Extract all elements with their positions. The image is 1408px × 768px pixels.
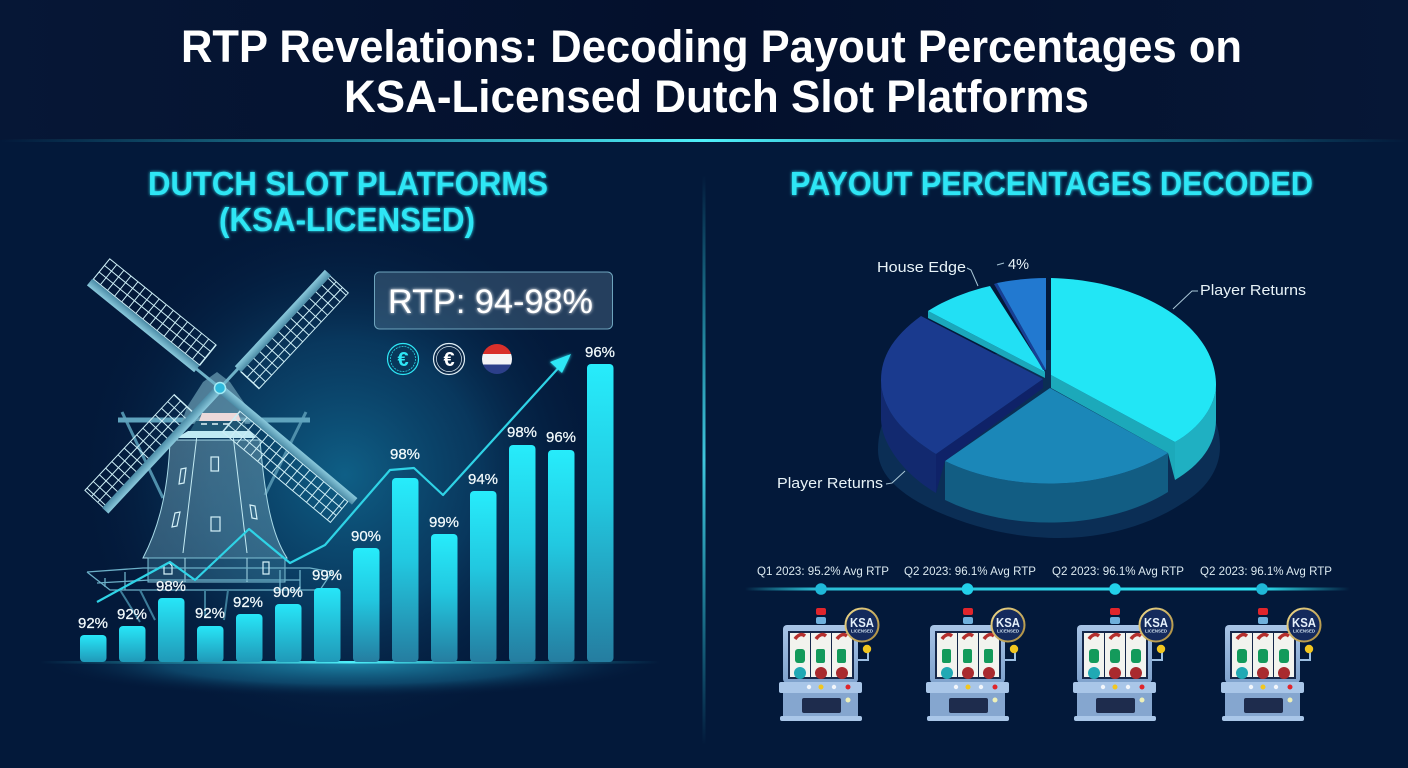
- slice: house edge: [928, 286, 1045, 378]
- KSA badge: [1288, 608, 1320, 642]
- timeline labels: Q2 2023: 96.1% Avg RTP: [1052, 566, 1184, 578]
- heading: Dutch slot platforms: [148, 165, 548, 238]
- header banner: [0, 0, 1408, 140]
- heading: Dutch slot platforms: DUTCH SLOT PLATFORMS: [148, 165, 548, 202]
- timeline labels: Q2 2023: 96.1% Avg RTP: [1200, 566, 1332, 578]
- title: KSA-Licensed Dutch Slot Platforms: [344, 71, 1089, 122]
- bar value labels: 99%: [312, 567, 342, 584]
- KSA badge: KSA: [1144, 616, 1168, 630]
- timeline labels: [757, 566, 1332, 578]
- bar value labels: 96%: [546, 429, 576, 446]
- windmill tower: [87, 435, 332, 622]
- bar value labels: 96%: [585, 344, 615, 361]
- pie label: 4 percent: 4%: [1008, 257, 1029, 273]
- windmill sail: north-west: [87, 258, 240, 391]
- timeline labels: Q2 2023: 96.1% Avg RTP: [904, 566, 1036, 578]
- bar value labels: [78, 344, 615, 632]
- pie label: player returns left: [777, 471, 905, 492]
- windmill cap: [176, 372, 256, 438]
- bar value labels: 92%: [195, 605, 225, 622]
- title: RTP Revelations: Decoding Payout Percentages on: [181, 21, 1242, 72]
- KSA badge: [1140, 608, 1172, 642]
- slice: mid blue: [945, 388, 1168, 523]
- KSA badge: LICENSED: [1293, 628, 1316, 634]
- KSA badge: LICENSED: [997, 628, 1020, 634]
- icon: white euro coin: €: [443, 349, 455, 371]
- bars: [80, 364, 614, 662]
- bar value labels: 98%: [507, 424, 537, 441]
- icon: white euro coin: [434, 344, 464, 374]
- KSA badge: KSA: [996, 616, 1020, 630]
- pie label: player returns right: [1173, 283, 1306, 309]
- slice: player returns cyan: [1051, 278, 1216, 480]
- windmill hub: [214, 382, 226, 394]
- illustration: windmill: [84, 258, 357, 622]
- windmill sail: south-east: [199, 385, 357, 526]
- icon: slot machine 2: [926, 608, 1024, 721]
- bar value labels: 92%: [233, 594, 263, 611]
- icon: teal euro coin: €: [397, 349, 409, 371]
- windmill sail: north-east: [217, 270, 349, 408]
- pie label: 4 percent: [997, 257, 1029, 273]
- KSA badge: [846, 608, 878, 642]
- pie shadow: [878, 350, 1220, 538]
- KSA badge: [992, 608, 1024, 642]
- timeline labels: Q1 2023: 95.2% Avg RTP: [757, 566, 889, 578]
- pie label: house edge: House Edge: [877, 260, 966, 276]
- pie chart: [878, 278, 1220, 538]
- timeline dots: [815, 583, 1268, 595]
- bar value labels: 98%: [390, 446, 420, 463]
- heading: Dutch slot platforms: (KSA-LICENSED): [219, 201, 475, 238]
- KSA badge: KSA: [1292, 616, 1316, 630]
- RTP callout: [374, 272, 612, 329]
- pie label: player returns right: Player Returns: [1200, 283, 1306, 299]
- icon: Dutch flag: [482, 344, 512, 374]
- windmill gallery braces: [118, 412, 310, 498]
- bar value labels: 94%: [468, 471, 498, 488]
- windmill sail: south-west: [84, 368, 223, 514]
- slice: 4 percent: [994, 278, 1046, 370]
- KSA badge: KSA: [850, 616, 874, 630]
- RTP callout: RTP: 94-98%: [388, 283, 593, 321]
- pie label: player returns left: Player Returns: [777, 476, 883, 492]
- bar value labels: 90%: [273, 584, 303, 601]
- bar value labels: 99%: [429, 514, 459, 531]
- icon: slot machine 3: [1073, 608, 1172, 721]
- bar value labels: 92%: [78, 615, 108, 632]
- icon: slot machine 1: [779, 608, 878, 721]
- chart baseline glow: [40, 661, 660, 733]
- bar value labels: 90%: [351, 528, 381, 545]
- KSA badge: LICENSED: [1145, 628, 1168, 634]
- icon: slot machine 4: [1221, 608, 1320, 721]
- icon: teal euro coin: [388, 344, 418, 374]
- bar value labels: 92%: [117, 606, 147, 623]
- slice: player returns dark blue: [881, 316, 1043, 493]
- bar value labels: 98%: [156, 578, 186, 595]
- bar chart: [40, 344, 660, 733]
- timeline: [745, 566, 1350, 595]
- pie label: house edge: [877, 260, 978, 286]
- heading: payout percentages decoded: PAYOUT PERCENTAGES DECODED: [790, 165, 1313, 202]
- trend line arrow: [97, 354, 571, 602]
- KSA badge: LICENSED: [851, 628, 874, 634]
